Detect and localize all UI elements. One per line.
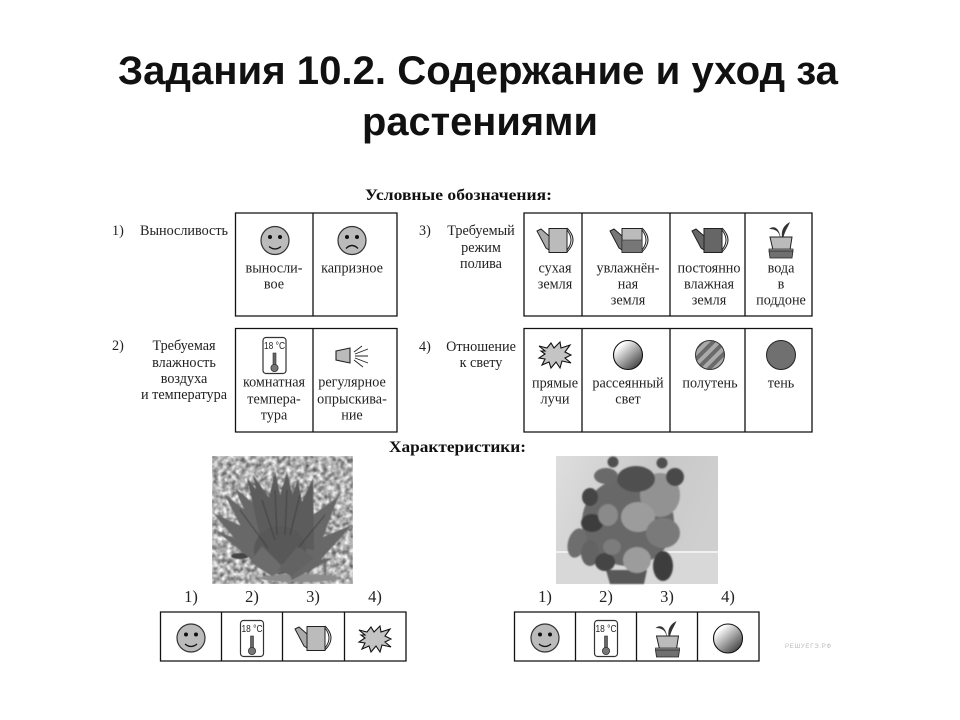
text: diffused light: свет	[615, 392, 641, 408]
icon: partial shade	[696, 340, 724, 370]
text: hardy: вое	[264, 276, 284, 292]
label: light: Отношение	[446, 339, 516, 355]
icon: full watering can	[692, 228, 728, 252]
icon: thermometer	[240, 620, 264, 656]
label: watering: режим	[461, 240, 501, 256]
icon: diffused light	[714, 624, 742, 653]
icon: watering can	[295, 626, 331, 650]
title: Задания 10.2. Содержание и уход за	[118, 49, 839, 93]
numbers: 4)	[721, 587, 735, 606]
icon: happy face	[531, 624, 559, 652]
text: moist soil: земля	[611, 292, 646, 308]
label: watering: Требуемый	[447, 223, 515, 239]
text: water in tray: вода	[768, 260, 795, 276]
panel: humidity and temperature legend	[112, 328, 397, 432]
label: watering: полива	[460, 256, 503, 272]
label: humidity and temperature: воздуха	[161, 371, 208, 387]
icon: thermometer: 18 °C	[264, 340, 285, 352]
heading: legend: Условные обозначения:	[365, 187, 552, 204]
text: constantly moist soil: постоянно	[678, 260, 740, 276]
text: direct rays: лучи	[541, 392, 570, 408]
table: watering	[524, 213, 812, 316]
text: regular spraying: регулярное	[318, 374, 386, 390]
icon: direct rays	[539, 342, 571, 368]
numbers: 1)	[538, 587, 552, 606]
icon: sad face	[338, 226, 366, 254]
icon: dry watering can	[537, 228, 573, 252]
numbers: 2)	[245, 587, 259, 606]
icon: half-full watering can	[610, 228, 648, 252]
numbers: 3)	[660, 587, 674, 606]
label: light: к свету	[460, 355, 503, 371]
text: capricious: капризное	[321, 260, 383, 276]
label: humidity and temperature: 2)	[112, 338, 124, 354]
text: partial shade: полутень	[682, 376, 738, 392]
title: растениями	[362, 100, 598, 144]
label: humidity and temperature: и температура	[141, 387, 228, 403]
icon: spray	[336, 346, 368, 367]
icon: thermometer	[594, 620, 618, 656]
text: hardy: выносли-	[246, 260, 303, 276]
photo: violet	[556, 456, 718, 584]
label: hardiness: 1)	[112, 223, 124, 239]
text: shade: тень	[768, 376, 795, 392]
text: regular spraying: ние	[341, 408, 363, 424]
icon: diffused light	[614, 340, 642, 370]
table	[160, 612, 406, 661]
text: constantly moist soil: влажная	[684, 276, 735, 292]
icon: happy face	[261, 226, 289, 254]
table	[514, 612, 759, 661]
panel: light legend	[419, 328, 812, 432]
icon: shade	[766, 340, 796, 370]
watermark: РЕШУЕГЭ.РФ	[785, 644, 831, 650]
numbers: 2)	[599, 587, 613, 606]
answer row: violet	[514, 587, 759, 661]
photo: agave	[212, 456, 353, 584]
label: humidity and temperature: Требуемая	[152, 338, 216, 354]
text: diffused light: рассеянный	[592, 376, 664, 392]
text: dry soil: земля	[538, 276, 573, 292]
label: hardiness: Выносливость	[140, 223, 229, 239]
text: direct rays: прямые	[532, 376, 578, 392]
numbers: 3)	[306, 587, 320, 606]
panel: watering legend	[419, 213, 812, 316]
icon: happy face	[177, 624, 205, 652]
numbers: 1)	[184, 587, 198, 606]
text: room temperature: комнатная	[243, 374, 306, 390]
label: light: 4)	[419, 339, 431, 355]
text: room temperature: темпера-	[247, 392, 301, 408]
text: dry soil: сухая	[539, 260, 572, 276]
text: water in tray: в	[778, 276, 785, 292]
table: humidity	[236, 328, 397, 432]
answer row: agave	[160, 587, 406, 661]
text: regular spraying: опрыскива-	[317, 392, 387, 408]
text: moist soil: увлажнён-	[596, 260, 660, 276]
text: moist soil: ная	[618, 276, 639, 292]
icon: pot in tray	[656, 621, 680, 657]
text: constantly moist soil: земля	[692, 292, 727, 308]
icon: thermometer: 18 °C	[596, 623, 617, 635]
title	[118, 49, 839, 144]
text: room temperature: тура	[261, 408, 288, 424]
text: water in tray: поддоне	[756, 292, 806, 308]
table: light	[524, 328, 812, 432]
icon: thermometer: 18 °C	[242, 623, 263, 635]
table: hardiness	[236, 213, 397, 316]
label: humidity and temperature: влажность	[152, 355, 216, 371]
label: watering: 3)	[419, 223, 431, 239]
icon: direct rays	[359, 626, 391, 652]
heading: characteristics: Характеристики:	[389, 439, 526, 456]
icon: thermometer	[263, 338, 286, 374]
numbers	[538, 587, 735, 606]
icon: pot in tray	[769, 222, 793, 258]
numbers	[184, 587, 382, 606]
numbers: 4)	[368, 587, 382, 606]
panel: hardiness legend	[112, 213, 397, 316]
